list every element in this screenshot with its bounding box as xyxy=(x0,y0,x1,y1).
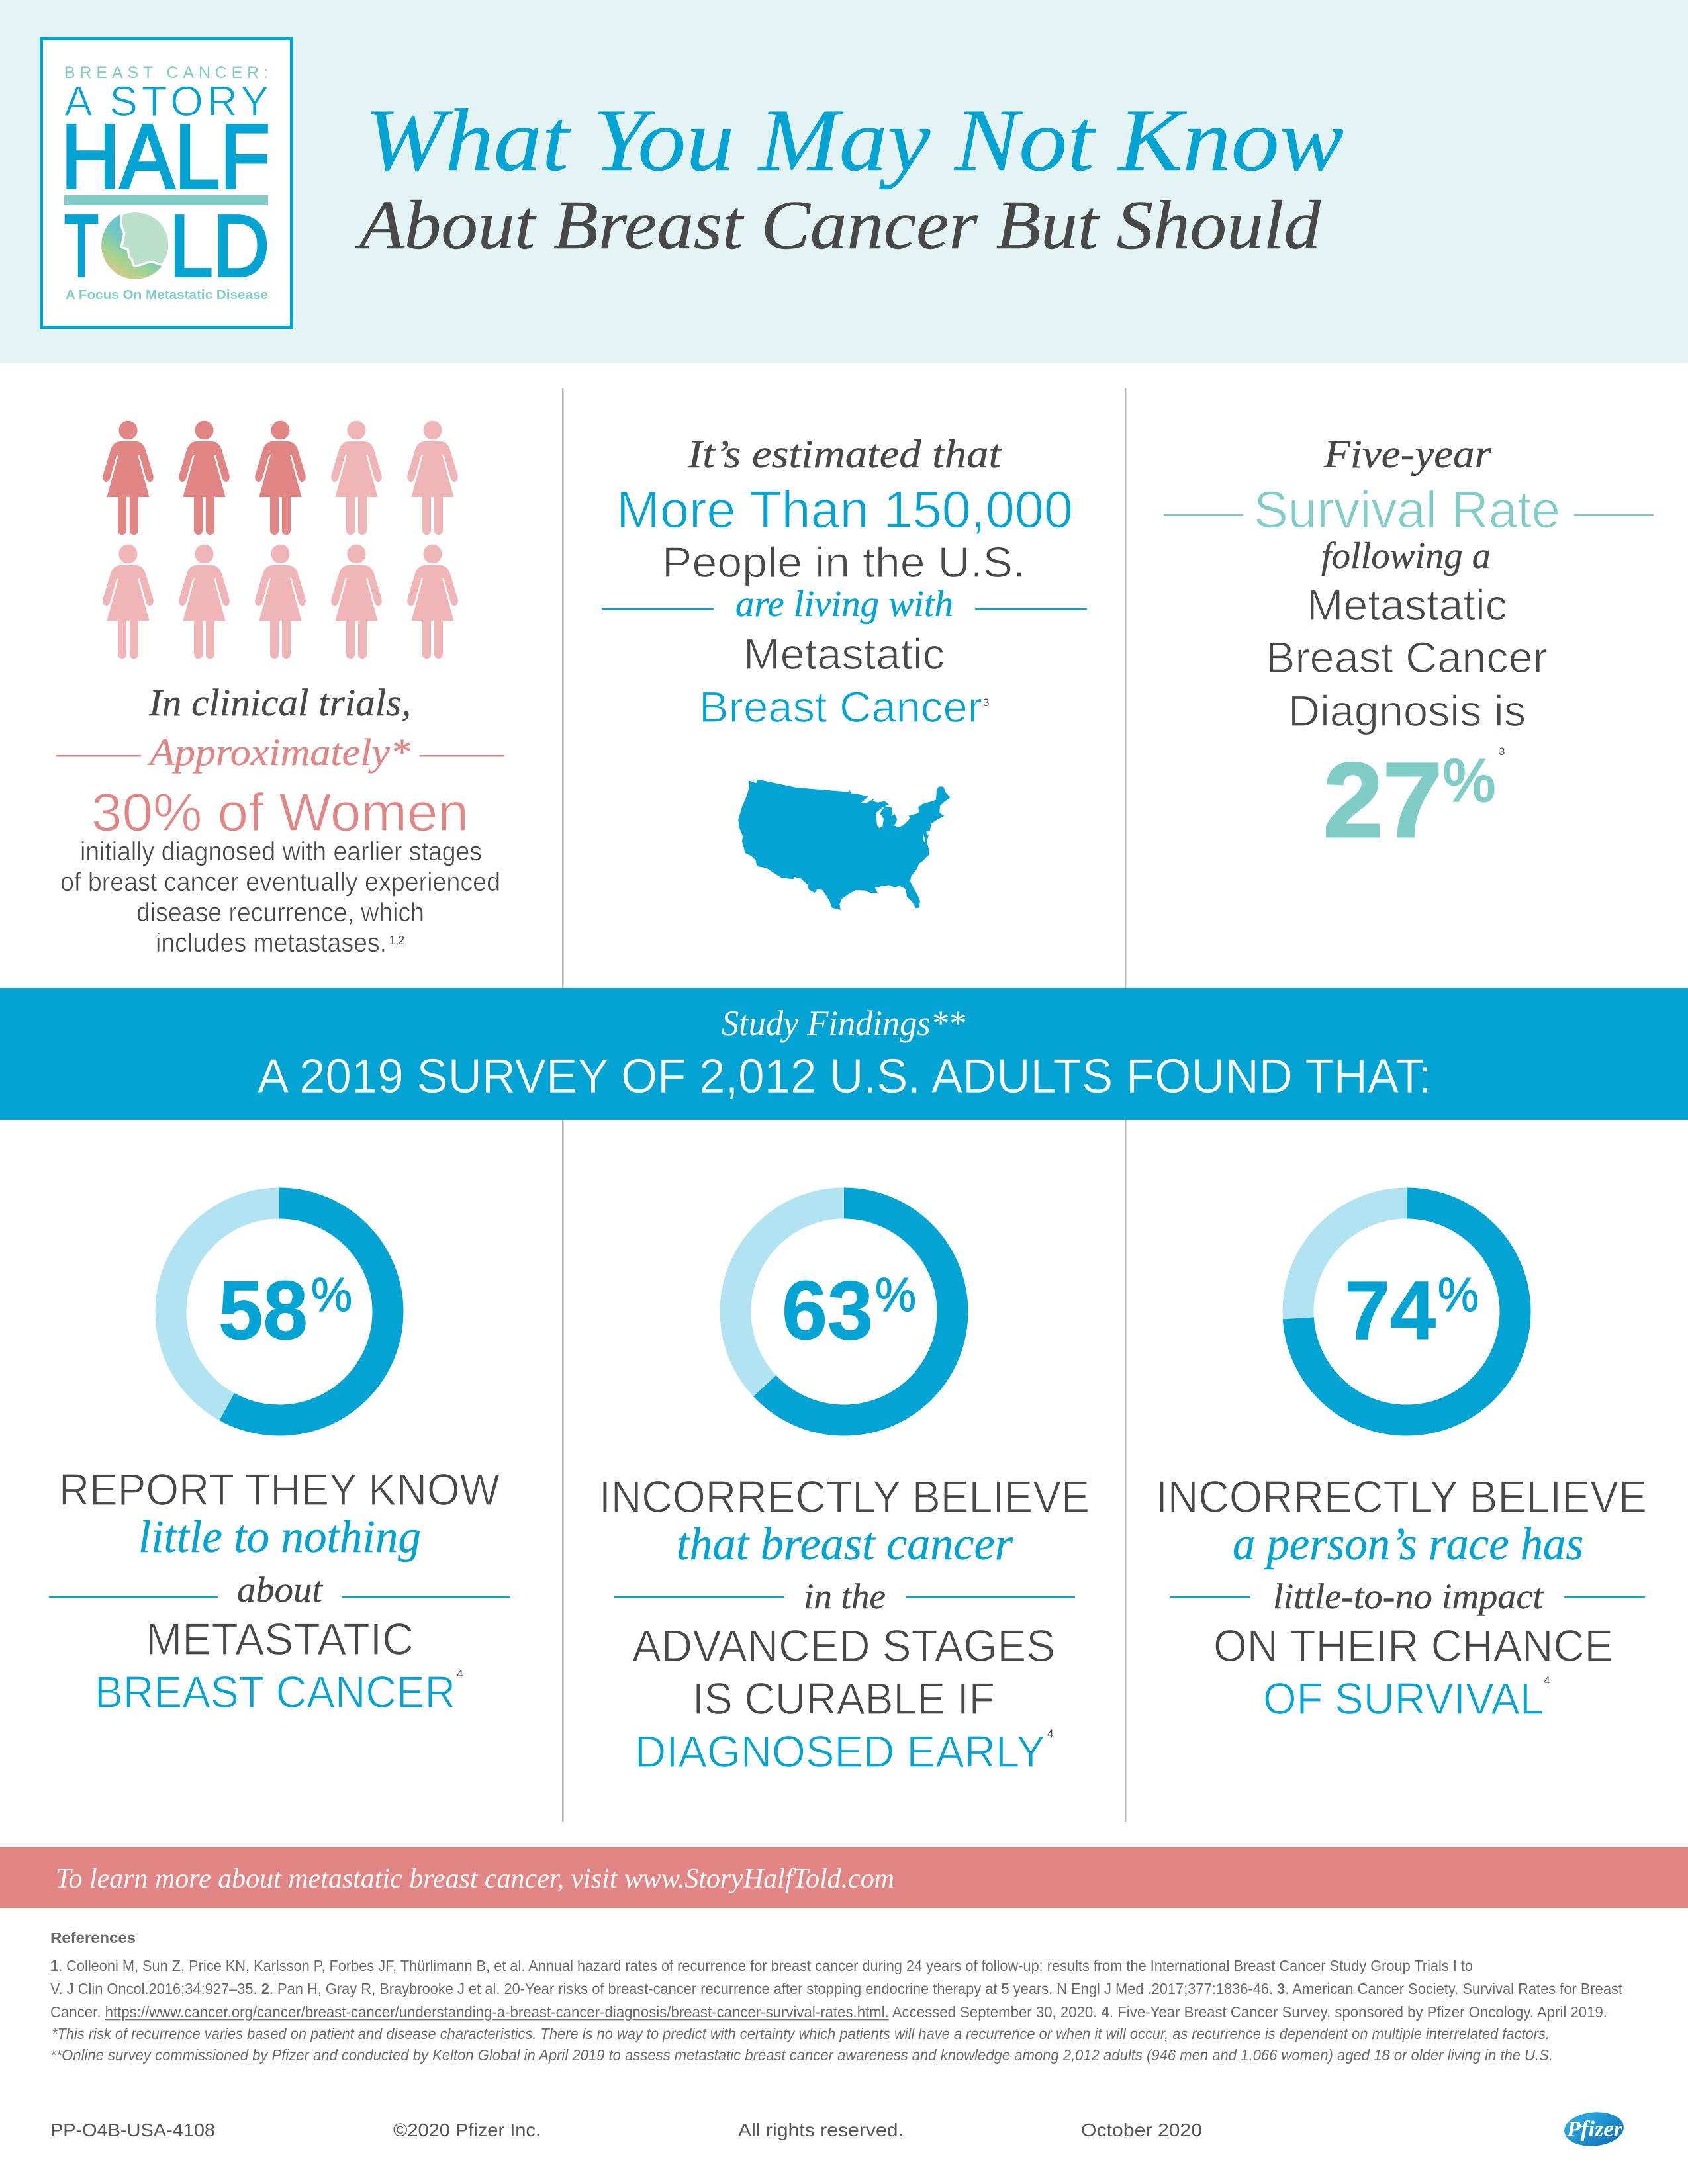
panel: 74% finding xyxy=(1156,1203,1647,1724)
references xyxy=(50,1929,1623,2064)
band: study findings xyxy=(0,988,1688,1120)
panel: more than 150,000 xyxy=(602,432,1087,910)
text: finding 2: 4 xyxy=(1047,1727,1053,1740)
text: metastatic breast cancer diagnosis is: Diagnosis is xyxy=(1288,686,1526,735)
logo icon: face in circle xyxy=(101,211,169,279)
references: V. J Clin Oncol.2016;34:927–35. 2. Pan H, Gray R, Braybrooke J et al. 20-Year risks of breast-cancer recurrence after stopping endocrine therapy at 5 years. N Engl J Med .2017;377:1836-46. 3. American Cancer Society. Survival Rates for Breast xyxy=(50,1980,1623,1997)
text: finding 2: IS CURABLE IF xyxy=(692,1674,995,1724)
title: About Breast Cancer But Should xyxy=(355,186,1321,263)
donut chart: 63% xyxy=(735,1203,953,1420)
text: finding 2: in the xyxy=(804,1576,886,1616)
logo: A Story Half Told xyxy=(41,38,291,327)
text: finding 1: 4 xyxy=(457,1668,463,1680)
donut chart: 58% xyxy=(171,1203,388,1420)
body text xyxy=(60,837,500,958)
heading: in clinical trials: In clinical trials, xyxy=(148,681,411,724)
logo: A Story Half Told: BREAST CANCER: xyxy=(64,64,268,82)
text: finding 2 xyxy=(599,1472,1090,1777)
text: following a: following a xyxy=(1321,535,1491,576)
pictogram: 3 of 10 women xyxy=(103,421,458,659)
body text: disease recurrence, which xyxy=(136,898,424,927)
text: metastatic breast cancer: Breast Cancer xyxy=(699,682,982,731)
icon: US map xyxy=(738,779,951,910)
stat: 30% of women: 30% of Women xyxy=(91,783,469,842)
donut chart: 58%: % xyxy=(311,1269,352,1322)
text: finding 3: ON THEIR CHANCE xyxy=(1213,1621,1613,1671)
body text: includes metastases. xyxy=(156,929,387,958)
donut chart: 58%: 58 xyxy=(218,1265,308,1357)
text: metastatic breast cancer diagnosis is: Breast Cancer xyxy=(1266,633,1548,682)
text: finding 1: METASTATIC xyxy=(146,1614,414,1664)
heading: survival rate: Survival Rate xyxy=(1254,480,1560,539)
logo: A Story Half Told: A Focus On Metastatic Disease xyxy=(66,287,268,302)
text: finding 3 xyxy=(1156,1472,1647,1724)
band: study findings: A 2019 SURVEY OF 2,012 U.S. ADULTS FOUND THAT: xyxy=(258,1050,1432,1103)
donut chart: 63%: 63 xyxy=(782,1265,873,1357)
title: What You May Not Know xyxy=(365,91,1344,190)
text: finding 2: INCORRECTLY BELIEVE xyxy=(599,1472,1090,1522)
footer xyxy=(50,2110,1625,2148)
text: finding 2: ADVANCED STAGES xyxy=(632,1621,1055,1671)
footer: All rights reserved. xyxy=(738,2120,904,2140)
stat: 27%: 27 xyxy=(1323,741,1442,859)
title xyxy=(355,91,1344,263)
text: metastatic breast cancer diagnosis is: Metastatic xyxy=(1307,580,1507,629)
text: metastatic breast cancer: 3 xyxy=(983,696,989,709)
panel: 30% of women xyxy=(56,421,504,958)
text: finding 3: a person’s race has xyxy=(1233,1519,1583,1570)
band: call to action: To learn more about metastatic breast cancer, visit www.StoryHalfTold.com xyxy=(56,1864,894,1894)
header band xyxy=(0,0,1688,363)
text: finding 1 xyxy=(49,1465,510,1717)
text: finding 3: INCORRECTLY BELIEVE xyxy=(1156,1472,1647,1522)
text: finding 1: about xyxy=(237,1570,324,1610)
text: finding 3: OF SURVIVAL xyxy=(1263,1674,1544,1724)
text: five-year: Five-year xyxy=(1323,432,1492,476)
footer: October 2020 xyxy=(1081,2120,1202,2140)
text: metastatic breast cancer diagnosis is xyxy=(1266,580,1548,735)
donut chart: 74%: % xyxy=(1438,1269,1479,1322)
body text: 1,2 xyxy=(389,934,404,947)
donut chart: 63%: % xyxy=(875,1269,916,1322)
text: metastatic breast cancer: Metastatic xyxy=(743,629,945,678)
panel: five-year survival rate xyxy=(1164,432,1654,859)
stat: 27%: % xyxy=(1442,746,1496,816)
logo: A Story Half Told: HALF xyxy=(61,106,270,208)
text: people in the U.S.: People in the U.S. xyxy=(662,538,1025,586)
text: it's estimated: It’s estimated that xyxy=(687,432,1002,476)
panel: 63% finding xyxy=(599,1203,1090,1777)
body text: initially diagnosed with earlier stages xyxy=(80,837,482,866)
text: finding 2: that breast cancer xyxy=(677,1519,1013,1570)
body text: of breast cancer eventually experienced xyxy=(60,868,500,897)
references: References xyxy=(50,1929,136,1946)
logo: A Story Half Told: LD xyxy=(169,197,269,295)
references: Cancer. https://www.cancer.org/cancer/breast-cancer/understanding-a-breast-cancer-diagnosis/breast-cancer-survival-rates.html. Accessed September 30, 2020. 4. Five-Year Breast Cancer Survey, sponsored by Pfizer Oncology. April 2019. xyxy=(50,2003,1607,2021)
footer: ©2020 Pfizer Inc. xyxy=(393,2120,541,2140)
references: **Online survey commissioned by Pfizer and conducted by Kelton Global in April 2019 to assess metastatic breast cancer awareness and knowledge among 2,012 adults (946 men and 1,066 women) aged 18 or older living in the U.S. xyxy=(50,2046,1553,2064)
references: 1. Colleoni M, Sun Z, Price KN, Karlsson P, Forbes JF, Thürlimann B, et al. Annual hazard rates of recurrence for breast cancer during 24 years of follow-up: results from the International Breast Cancer Study Group Trials I to xyxy=(50,1957,1473,1974)
references: *This risk of recurrence varies based on patient and disease characteristics. There is no way to predict with certainty which patients will have a recurrence or when it will occur, as recurrence is dependent on multiple interrelated factors. xyxy=(52,2025,1550,2042)
stat: 27%: 3 xyxy=(1499,745,1505,758)
text: metastatic breast cancer xyxy=(699,629,989,731)
footer: PP-O4B-USA-4108 xyxy=(50,2120,215,2140)
text: finding 1: BREAST CANCER xyxy=(95,1667,455,1717)
panel: 58% finding xyxy=(49,1203,510,1717)
text: finding 3: little-to-no impact xyxy=(1273,1576,1544,1616)
donut chart: 74% xyxy=(1298,1203,1515,1420)
logo: A Story Half Told: T xyxy=(64,197,99,295)
heading: approximately: Approximately* xyxy=(147,731,410,774)
text: finding 1: little to nothing xyxy=(138,1512,421,1563)
text: are living with: are living with xyxy=(735,584,953,625)
text: finding 2: DIAGNOSED EARLY xyxy=(635,1727,1045,1777)
icon: Pfizer logo xyxy=(1563,2110,1625,2148)
donut chart: 74%: 74 xyxy=(1344,1265,1436,1357)
stat: 27% xyxy=(1323,741,1505,859)
band: study findings: Study Findings** xyxy=(722,1003,965,1043)
icon: Pfizer logo: Pfizer xyxy=(1566,2117,1623,2142)
band: call to action xyxy=(0,1847,1688,1908)
logo: A Story Half Told: A STORY xyxy=(64,77,269,125)
stat: more than 150,000: More Than 150,000 xyxy=(616,480,1073,539)
text: finding 3: 4 xyxy=(1544,1674,1550,1687)
text: finding 1: REPORT THEY KNOW xyxy=(59,1465,500,1515)
